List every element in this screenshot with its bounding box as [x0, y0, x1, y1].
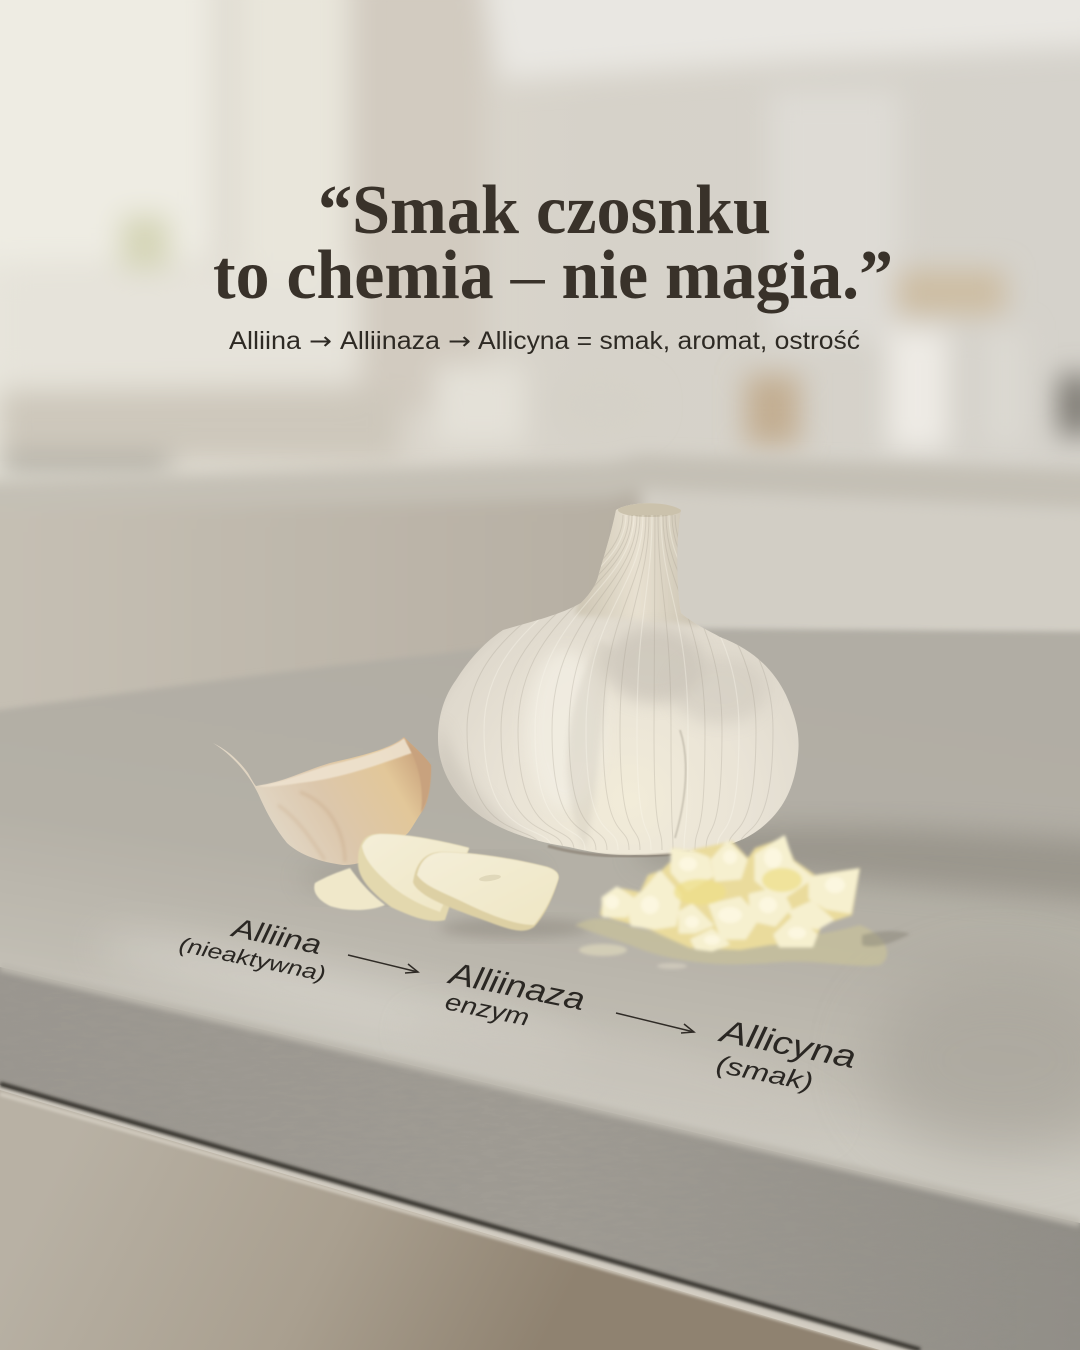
- subtitle: reaction summary: [229, 327, 860, 355]
- icon: garlic clove: [213, 737, 431, 865]
- cabinet below counter: [0, 1090, 880, 1350]
- subtitle: reaction summary: Alliinaza: [340, 327, 440, 355]
- title: to chemia – nie magia.”: [213, 237, 893, 314]
- subtitle: reaction summary: →: [448, 327, 471, 355]
- counter front face: [0, 967, 1080, 1350]
- label: Allicyna: Allicyna: [715, 1012, 859, 1075]
- label: Alliina: Alliina: [227, 912, 324, 960]
- icon: minced garlic: [575, 836, 910, 969]
- icon: garlic slices: [314, 834, 559, 931]
- reaction chain on the counter: [177, 912, 859, 1097]
- label: Alliinaza: enzym: [443, 988, 531, 1032]
- label: Allicyna: [714, 1012, 859, 1097]
- label: Alliina: [177, 912, 328, 986]
- background: blurred kitchen: [0, 0, 1080, 730]
- back counter and lower cabinets: [0, 455, 1080, 730]
- icon: garlic bulb: [430, 500, 799, 856]
- garlic juice: [575, 919, 910, 969]
- subtitle: reaction summary: Allicyna = smak, aromat, ostrość: [478, 327, 860, 355]
- kitchen counter: [0, 628, 1080, 1350]
- arrow: Alliina to Alliinaza: [348, 955, 418, 973]
- title: “Smak czosnku: [318, 172, 771, 249]
- label: Allicyna: (smak): [714, 1050, 815, 1097]
- arrow: Alliinaza to Allicyna: [616, 1013, 694, 1033]
- subtitle: reaction summary: →: [309, 327, 332, 355]
- label: Alliinaza: Alliinaza: [444, 955, 588, 1017]
- label: Alliina: (nieaktywna): [177, 933, 328, 986]
- counter light and shadow: [91, 826, 1080, 1163]
- label: Alliinaza: [443, 955, 588, 1032]
- counter top surface: [0, 628, 1080, 1240]
- title: [213, 172, 893, 314]
- subtitle: reaction summary: Alliina: [229, 327, 301, 355]
